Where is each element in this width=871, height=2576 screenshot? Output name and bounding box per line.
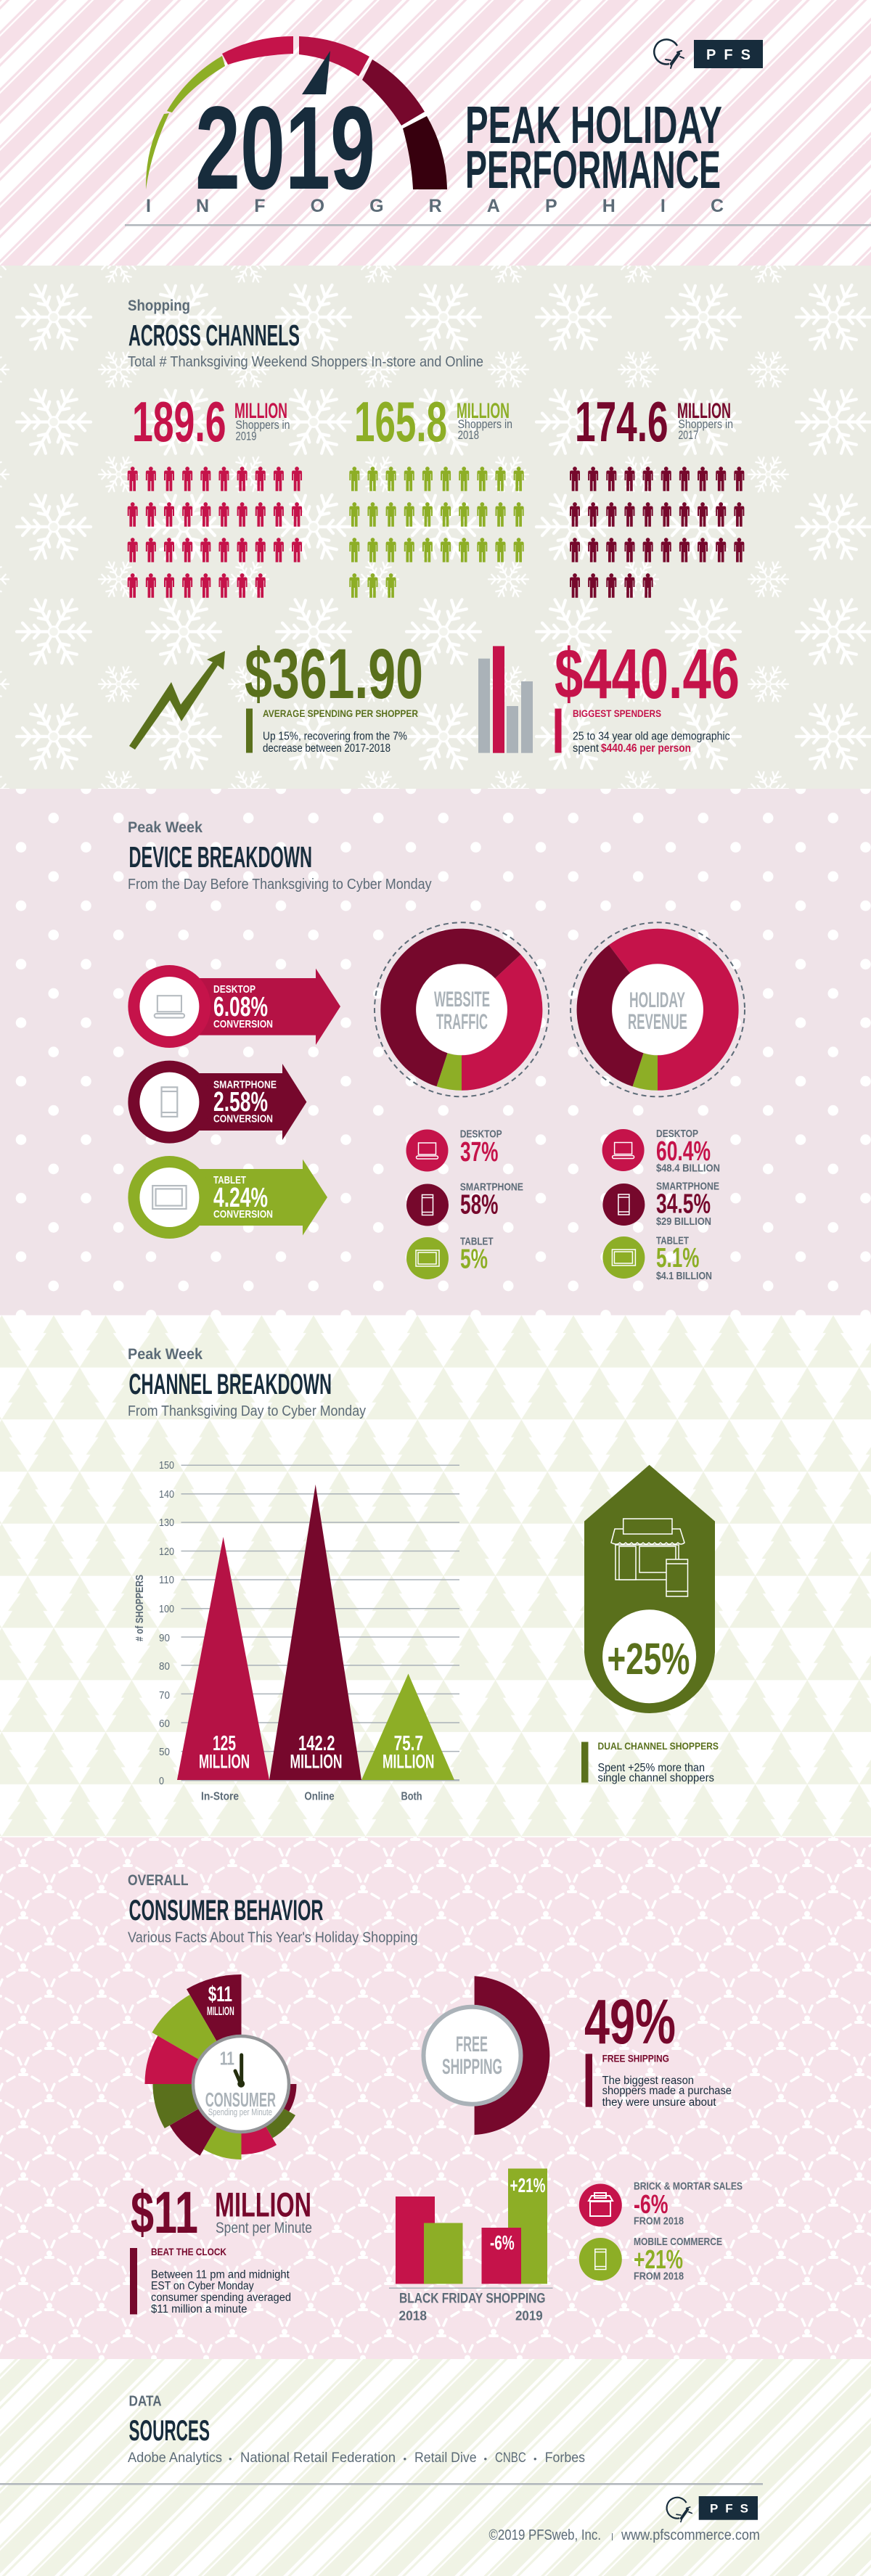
arrow: smartphone conversion: CONVERSION [213,1113,273,1125]
triangle chart: shoppers by channel: 110 [159,1575,174,1586]
arrow: tablet conversion: 4.24% [213,1183,268,1213]
stat: brick and mortar sales [579,2180,743,2228]
stat: 165.8 million 2018: MILLION [457,399,510,423]
donut chart: holiday revenue [571,922,745,1096]
legend: website traffic: DESKTOP [460,1128,502,1141]
sources list: Adobe Analytics [128,2450,222,2466]
radial clock chart: CONSUMER [205,2088,276,2111]
panel: across channels [0,266,871,789]
logo: PFS [654,39,763,68]
stat: $11 million per minute: BEAT THE CLOCK [151,2246,226,2257]
section heading: ACROSS CHANNELS [128,319,300,352]
title: peak holiday performance [465,97,722,200]
triangle chart: shoppers by channel: 150 [159,1460,174,1472]
section heading: Shopping [128,298,190,314]
stat: biggest spenders: $440.46 per person [601,742,691,755]
speedometer gauge [146,36,447,189]
section heading: Peak Week [128,819,203,836]
bar chart: black friday shopping: BLACK FRIDAY SHOPPING [399,2292,546,2307]
bar chart: black friday shopping: -6% [490,2231,515,2254]
stat: biggest spenders: $440.46 [555,634,740,713]
half donut: free shipping: SHIPPING [442,2055,502,2079]
radial clock chart: Spending per Minute [208,2107,272,2117]
stat: 49% free shipping: they were unsure about [602,2096,716,2109]
triangle chart: shoppers by channel: 140 [159,1489,174,1501]
bar chart: black friday shopping: 2018 [399,2308,427,2323]
stat: average spending: decrease between 2017-2018 [263,742,390,755]
legend: website traffic: 58% [460,1190,498,1221]
donut chart: holiday revenue: REVENUE [628,1010,687,1034]
sources list: • [229,2453,232,2464]
section heading: CHANNEL BREAKDOWN [129,1369,332,1400]
stat: mobile commerce: FROM 2018 [634,2271,684,2283]
stat: 49% free shipping: shoppers made a purchase [602,2085,732,2097]
copyright line: www.pfscommerce.com [621,2527,760,2543]
stat: 189.6 million 2019: MILLION [234,399,287,423]
legend: holiday revenue [602,1128,720,1282]
arrow: desktop conversion: CONVERSION [213,1018,273,1030]
sources list [128,2450,585,2466]
triangle chart: shoppers by channel: 80 [159,1661,170,1673]
badge: +25% dual channel: +25% [607,1634,690,1683]
section heading [128,819,432,893]
triangle chart: shoppers by channel: 125 [213,1732,236,1755]
stat: biggest spenders: 25 to 34 year old age demographic [573,731,730,743]
stat: 165.8 million 2018: 165.8 [354,390,447,454]
callout: dual channel shoppers: Spent +25% more than [598,1762,705,1774]
section heading: Various Facts About This Year's Holiday Shopping [128,1929,418,1945]
triangle chart: shoppers by channel: 60 [159,1718,170,1730]
arrow: smartphone conversion: 2.58% [213,1087,268,1117]
sources list: CNBC [495,2450,526,2466]
stat: mobile commerce: +21% [634,2244,683,2274]
subtitle: infographic: INFOGRAPHIC [146,196,724,216]
sources list: Retail Dive [414,2450,477,2466]
bar chart: black friday shopping: 2019 [515,2308,543,2323]
stat: 174.6 million 2017: Shoppers in [678,417,733,431]
stat: average spending: AVERAGE SPENDING PER SHOPPER [263,707,418,719]
sources list: • [533,2453,537,2464]
triangle chart: shoppers by channel: Both [401,1791,422,1803]
arrow: smartphone conversion [128,1061,306,1144]
stat: 189.6 million 2019: 189.6 [132,390,226,454]
section heading: DATA [129,2394,162,2410]
arrow: desktop conversion: 6.08% [213,992,268,1022]
stat: $11 million per minute: EST on Cyber Monday [151,2280,254,2292]
arrow: desktop conversion: DESKTOP [213,983,255,996]
section heading: Peak Week [128,1346,203,1363]
triangle chart: shoppers by channel: 50 [159,1747,170,1758]
triangle chart: shoppers by channel: 90 [159,1633,170,1644]
sources list: • [404,2453,406,2464]
pictogram: 2017 shoppers [570,467,744,598]
donut chart: holiday revenue: HOLIDAY [629,988,685,1012]
stat: brick and mortar sales: BRICK & MORTAR SALES [634,2180,743,2193]
sources list: • [483,2453,488,2464]
stat: average spending: $361.90 [245,634,423,713]
triangle chart: shoppers by channel: 0 [159,1776,164,1787]
stat: 174.6 million 2017: 2017 [678,428,698,442]
panel: sources footer [0,2359,871,2576]
stat: $11 million per minute: consumer spending averaged [151,2292,291,2304]
donut chart: website traffic: TRAFFIC [436,1010,488,1034]
stat: $11 million per minute [130,2180,312,2315]
triangle chart: shoppers by channel: 70 [159,1690,170,1702]
legend: holiday revenue: 34.5% [656,1189,711,1220]
stat: $11 million per minute: $11 [131,2180,198,2246]
legend: holiday revenue: $29 BILLION [656,1215,711,1228]
radial clock chart [145,1974,296,2159]
legend: website traffic [406,1128,523,1279]
section heading: Total # Thanksgiving Weekend Shoppers In-store and Online [128,354,483,370]
triangle chart: shoppers by channel: MILLION [199,1750,250,1772]
stat: mobile commerce: MOBILE COMMERCE [634,2236,722,2248]
pictogram: 2018 shoppers [349,467,524,598]
badge: +25% dual channel [584,1465,715,1713]
callout: dual channel shoppers [581,1740,719,1784]
callout: dual channel shoppers: DUAL CHANNEL SHOPPERS [598,1740,719,1752]
panel: channel breakdown [0,1315,871,1837]
arrow: tablet conversion [128,1156,327,1239]
radial clock chart: MILLION [207,2004,234,2018]
triangle chart: shoppers by channel: 142.2 [298,1732,335,1755]
section heading [128,298,483,370]
legend: holiday revenue: SMARTPHONE [656,1181,719,1193]
stat: $11 million per minute: MILLION [215,2186,311,2223]
donut chart: website traffic [375,922,549,1096]
stat: average spending: Up 15%, recovering from the 7% [263,731,407,743]
arrow: tablet conversion: TABLET [213,1174,246,1186]
stat: 189.6 million 2019: Shoppers in [235,418,290,432]
triangle chart: shoppers by channel: 120 [159,1546,174,1558]
section heading [129,2394,210,2447]
section heading [128,1872,418,1945]
stat: mobile commerce [579,2236,722,2283]
legend: website traffic: 37% [460,1137,498,1168]
icon: rising trend arrow [129,651,225,750]
stat: biggest spenders [555,634,740,755]
panel: consumer behavior [0,1837,871,2359]
logo: PFS: PFS [706,47,751,63]
stat: brick and mortar sales: FROM 2018 [634,2215,684,2228]
stat: brick and mortar sales: -6% [634,2189,668,2219]
stat: $11 million per minute: $11 million a minute [151,2303,247,2315]
section heading: CONSUMER BEHAVIOR [129,1895,324,1927]
triangle chart: shoppers by channel: In-Store [201,1791,239,1803]
legend: holiday revenue: $48.4 BILLION [656,1162,720,1174]
section heading [128,1346,366,1419]
radial clock chart: $11 [208,1982,232,2006]
bar chart: black friday shopping [389,2168,553,2323]
half donut: free shipping [424,1976,549,2135]
legend: website traffic: 5% [460,1244,488,1275]
section heading: From the Day Before Thanksgiving to Cyber Monday [128,877,432,893]
bar chart: black friday shopping: +21% [510,2174,546,2196]
section heading: From Thanksgiving Day to Cyber Monday [128,1403,366,1419]
stat: 165.8 million 2018: 2018 [458,428,479,442]
stat: biggest spenders: spent [573,742,600,755]
legend: holiday revenue: 5.1% [656,1243,700,1273]
donut chart: website traffic: WEBSITE [434,988,490,1012]
triangle chart: shoppers by channel: 100 [159,1604,174,1615]
panel: device breakdown [0,789,871,1315]
section heading: DEVICE BREAKDOWN [129,840,312,874]
pictogram: 2019 shoppers [128,467,302,598]
stat: 174.6 million 2017: MILLION [677,399,731,423]
callout: dual channel shoppers: single channel shoppers [598,1772,714,1784]
triangle chart: shoppers by channel: Online [304,1791,335,1803]
sources list: Forbes [545,2450,585,2466]
stat: 49% free shipping: The biggest reason [602,2075,694,2087]
legend: holiday revenue: TABLET [656,1235,689,1247]
half donut: free shipping: FREE [456,2033,488,2056]
legend: website traffic: SMARTPHONE [460,1181,523,1193]
stat: 49% free shipping: 49% [584,1987,676,2057]
stat: $11 million per minute: Spent per Minute [216,2220,312,2236]
stat: biggest spenders: BIGGEST SPENDERS [573,707,661,719]
stat: $11 million per minute: Between 11 pm and midnight [151,2268,290,2281]
triangle chart: shoppers by channel: 75.7 [394,1732,423,1755]
stat: average spending [245,634,423,755]
legend: website traffic: TABLET [460,1235,494,1247]
legend: holiday revenue: DESKTOP [656,1128,698,1140]
legend: holiday revenue: 60.4% [656,1136,711,1167]
stat: 189.6 million 2019: 2019 [235,429,257,443]
section heading: OVERALL [128,1872,189,1889]
section heading: SOURCES [129,2415,210,2447]
stat: 174.6 million 2017: 174.6 [575,390,668,454]
panel: header [0,0,871,266]
triangle chart: shoppers by channel [134,1460,459,1803]
copyright line: ©2019 PFSweb, Inc. [489,2527,601,2543]
stat: 49% free shipping [584,1987,732,2109]
title: peak holiday performance: PEAK HOLIDAY [465,97,722,155]
triangle chart: shoppers by channel: # of SHOPPERS [134,1575,146,1641]
logo: PFS: PFS [710,2502,748,2516]
copyright line [489,2527,760,2543]
bar chart icon [478,646,533,753]
triangle chart: shoppers by channel: MILLION [290,1750,343,1772]
arrow: smartphone conversion: SMARTPHONE [213,1078,277,1091]
stat: 49% free shipping: FREE SHIPPING [602,2053,669,2064]
arrow: tablet conversion: CONVERSION [213,1208,273,1221]
triangle chart: shoppers by channel: 130 [159,1517,174,1529]
title: peak holiday performance: PERFORMANCE [465,141,721,200]
arrow: desktop conversion [128,965,340,1048]
title: 2019: 2019 [195,81,375,214]
radial clock chart: 11 [220,2048,234,2070]
legend: holiday revenue: $4.1 BILLION [656,1270,712,1282]
sources list: National Retail Federation [240,2450,396,2466]
stat: 165.8 million 2018: Shoppers in [458,417,512,431]
triangle chart: shoppers by channel: MILLION [383,1750,434,1772]
logo: PFS [667,2496,758,2522]
